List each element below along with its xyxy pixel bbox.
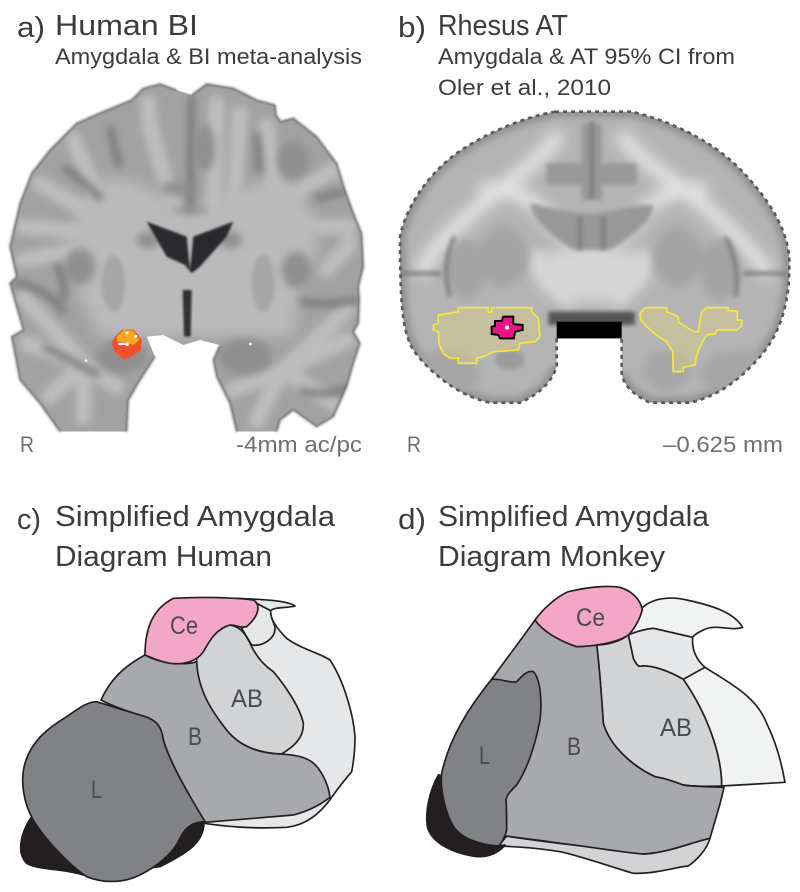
title line one: Simplified Amygdala — [438, 501, 710, 533]
activation cluster — [112, 329, 142, 359]
panel c heading — [17, 501, 336, 573]
accessory basal nucleus — [597, 635, 722, 786]
scan rim — [10, 84, 363, 432]
label AB: AB — [660, 714, 692, 742]
panel letter b: b) — [398, 12, 426, 44]
panel letter d: d) — [398, 504, 426, 536]
marker dots — [85, 343, 252, 362]
brain scan: human coronal slice — [8, 82, 366, 433]
orientation label R human: R — [20, 432, 34, 457]
title line two: Diagram Monkey — [438, 541, 666, 573]
black underlying nucleus — [427, 775, 505, 857]
middle light piece — [628, 628, 705, 679]
right amygdala outline — [640, 308, 742, 372]
central white matter — [73, 178, 317, 337]
subtitle line one: Amygdala & AT 95% CI from — [438, 44, 735, 69]
black underlying nucleus — [21, 817, 204, 875]
central nucleus — [145, 597, 258, 664]
third ventricle — [183, 290, 192, 337]
left amygdala outline — [433, 308, 540, 363]
title line two: Diagram Human — [55, 541, 272, 573]
label Ce: Ce — [576, 604, 605, 632]
ventricles — [147, 222, 233, 273]
panel letter c: c) — [17, 504, 41, 536]
orientation label R monkey: R — [407, 432, 421, 457]
bottom light band — [498, 836, 710, 873]
label B: B — [567, 733, 581, 761]
title line one: Simplified Amygdala — [55, 501, 336, 533]
top light lobe — [628, 598, 743, 637]
slice label human: -4mm ac/pc — [236, 432, 362, 457]
lateral nucleus — [441, 671, 541, 846]
subtitle: Amygdala & BI meta-analysis — [55, 44, 362, 69]
panel d heading — [398, 501, 710, 573]
diagram c: human amygdala — [21, 597, 355, 881]
accessory basal nucleus — [197, 625, 303, 754]
title: Human BI: Human BI — [55, 10, 198, 42]
basal nucleus — [443, 620, 724, 854]
AT cluster — [492, 317, 523, 338]
title: Rhesus AT: Rhesus AT — [438, 10, 568, 42]
panel b: Rhesus AT heading — [398, 10, 735, 100]
basal nucleus — [101, 655, 330, 822]
subtitle line two: Oler et al., 2010 — [438, 75, 611, 100]
label Ce: Ce — [170, 612, 198, 640]
label L: L — [479, 742, 490, 770]
lateral nucleus — [23, 702, 205, 881]
slice label monkey: –0.625 mm — [663, 432, 783, 457]
diagram d: monkey amygdala — [427, 586, 785, 873]
outer light nucleus — [200, 598, 355, 828]
central nucleus — [535, 586, 642, 647]
lower right light piece — [683, 667, 785, 786]
label AB: AB — [231, 685, 263, 713]
small upper piece — [242, 603, 275, 645]
pixelated edge of scan — [400, 112, 789, 403]
label L: L — [91, 776, 102, 804]
cluster centre dot — [505, 326, 509, 329]
label B: B — [188, 723, 202, 751]
panel a: Human BI heading — [17, 10, 362, 69]
panel letter a: a) — [17, 12, 45, 44]
brain scan: rhesus coronal slice — [400, 110, 800, 410]
